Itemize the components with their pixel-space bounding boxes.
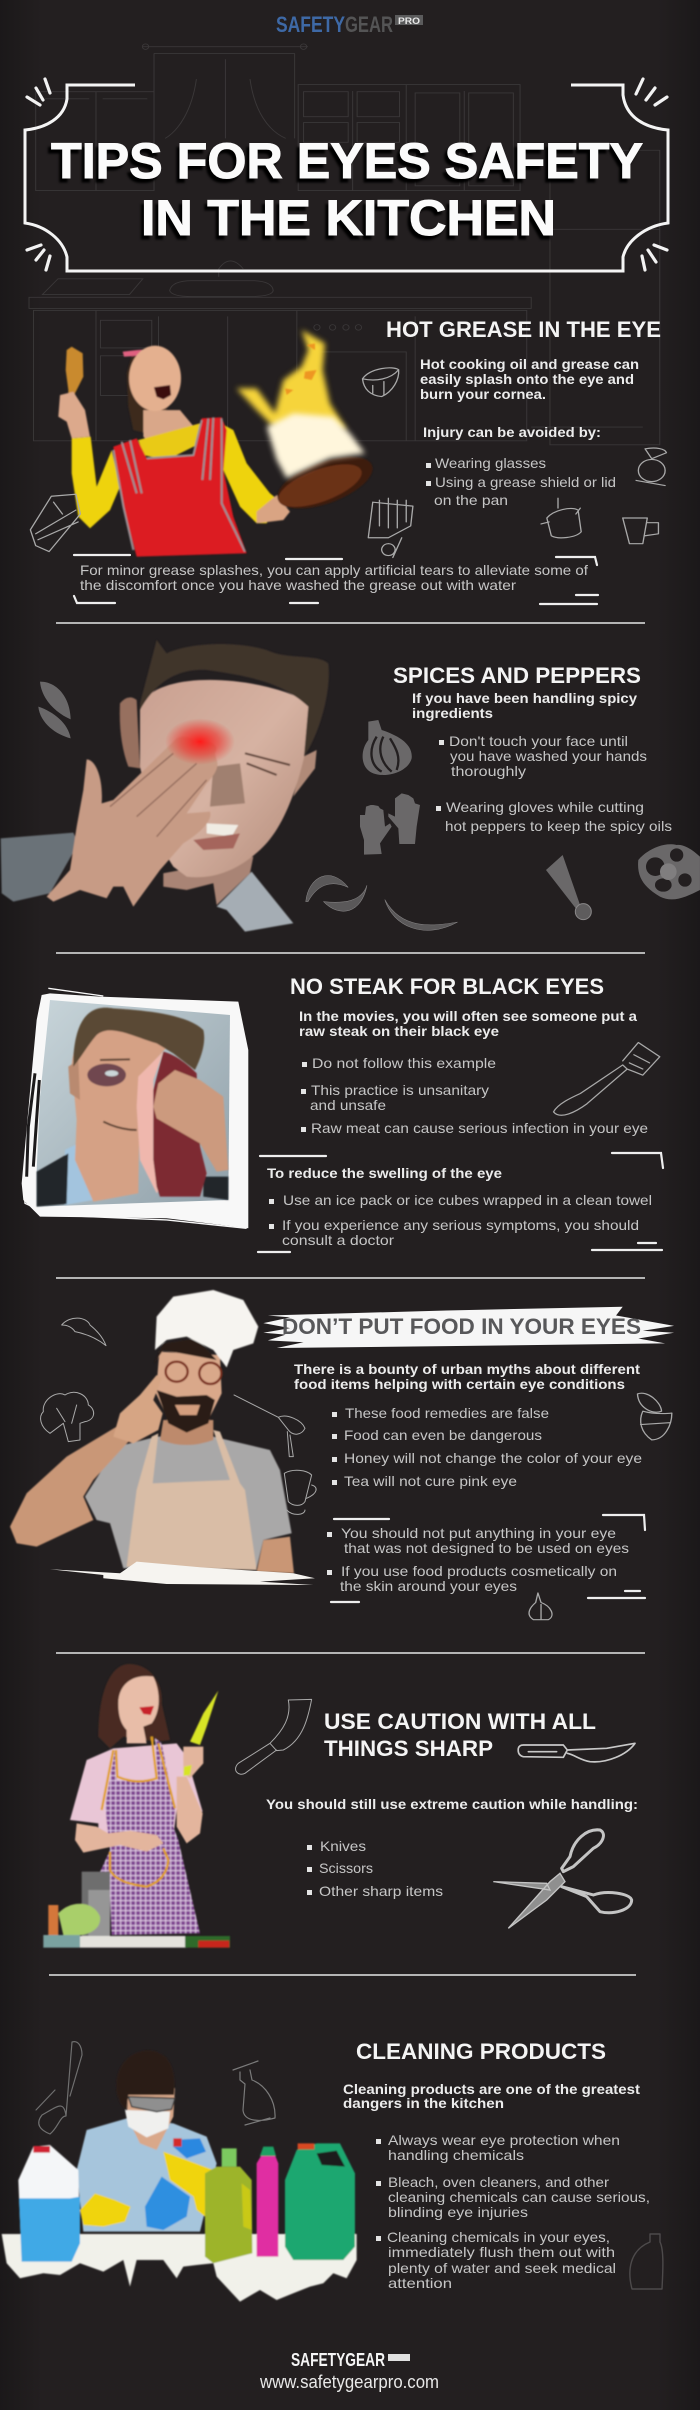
icon: bowl: [362, 368, 399, 397]
icon: stacked bowls: [637, 1393, 672, 1440]
footer logo: SAFETYGEAR: [291, 2350, 385, 2370]
panel: spices and peppers: [1, 640, 700, 932]
icon: onion: [363, 720, 412, 775]
heading: spices: SPICES AND PEPPERS: [393, 663, 641, 688]
intro text: easily splash onto the eye and: [420, 371, 634, 387]
chalk corner dashes: [74, 555, 598, 604]
bullet list: cosmetics: If you use food products cosmetically on: [341, 1563, 617, 1579]
intro text: burn your cornea.: [420, 386, 546, 402]
figure: woman and cleaning bottles: [2, 2050, 357, 2302]
bullet list: avoid injury: [426, 455, 616, 508]
bullet list: chemicals: immediately flush them out with: [388, 2244, 615, 2260]
intro text: If you have been handling spicy: [412, 690, 637, 706]
title: IN THE KITCHEN: [141, 190, 556, 246]
icon: fries: [368, 498, 413, 538]
icon: cleaver: [236, 1699, 312, 1774]
icon: pepper slice: [638, 844, 700, 899]
bullet list: chemicals: Bleach, oven cleaners, and other: [388, 2174, 609, 2190]
chalk corner dashes: [258, 1153, 663, 1252]
icon: spring onion: [546, 855, 591, 920]
bullet list: swelling: consult a doctor: [282, 1232, 394, 1248]
icon: basting brush: [36, 2042, 82, 2134]
title: TIPS FOR EYES SAFETY: [51, 133, 643, 189]
icon: scissors: [493, 1830, 632, 1928]
note: minor splashes: For minor grease splashes, you can apply artificial tears to alleviate some of: [80, 562, 588, 578]
icon: kitchen scale: [636, 448, 666, 486]
intro text: Injury can be avoided by:: [423, 424, 601, 440]
bullet list: avoid injury: Wearing glasses: [435, 455, 546, 471]
bullet list: spices: Don't touch your face until: [449, 733, 628, 749]
bullet list: avoid injury: Using a grease shield or lid: [435, 474, 616, 490]
bullet list: sharp items: Knives: [320, 1838, 366, 1854]
icon: sandwich: [30, 494, 80, 552]
icon: gloves: [360, 793, 420, 855]
intro text: raw steak on their black eye: [299, 1023, 499, 1039]
icon: curved chilies: [306, 876, 458, 930]
figure: man rubbing eye: [1, 640, 329, 932]
intro text: In the movies, you will often see someone put a: [299, 1008, 637, 1024]
icon: pot: [541, 498, 581, 538]
bullet list: cosmetics: [327, 1525, 629, 1594]
bullet list: spices: you have washed your hands: [450, 748, 647, 764]
bullet list: cosmetics: that was not designed to be used on eyes: [344, 1540, 629, 1556]
bullet list: chemicals: attention: [388, 2275, 452, 2291]
panel: use caution with sharp things: [43, 1664, 638, 1948]
header logo: SAFETY: [276, 12, 345, 37]
heading: caution: THINGS SHARP: [324, 1736, 493, 1761]
bullet list: sharp items: [307, 1838, 443, 1899]
icon: jug: [623, 518, 658, 544]
bullet list: avoid injury: on the pan: [434, 492, 508, 508]
heading: no steak: NO STEAK FOR BLACK EYES: [290, 974, 604, 999]
intro text: Hot cooking oil and grease can: [420, 356, 639, 372]
intro text: [412, 690, 637, 721]
icon: bottle: [630, 2234, 663, 2289]
bullet list: spices: hot peppers to keep the spicy oils: [445, 818, 672, 834]
bullet list: swelling: [269, 1192, 652, 1248]
panel: hot grease: [30, 317, 666, 604]
icon: kitchen knife: [518, 1743, 635, 1762]
heading: caution: USE CAUTION WITH ALL: [324, 1709, 596, 1734]
icon: spray bottle: [233, 2061, 275, 2125]
icon: garlic: [529, 1593, 552, 1620]
icon: mug: [284, 1470, 316, 1514]
bullet list: steak: [301, 1055, 648, 1136]
heading: hot grease: HOT GREASE IN THE EYE: [386, 317, 661, 342]
intro text: [299, 1008, 637, 1039]
heading: caution: [324, 1709, 596, 1761]
note: minor splashes: [80, 562, 588, 593]
header logo: GEAR: [345, 12, 393, 37]
chalk corner dashes: [331, 1515, 645, 1602]
bullet list: spices: Wearing gloves while cutting: [446, 799, 644, 815]
photo: man with steak in chalk frame: [22, 988, 248, 1228]
title: [51, 133, 643, 246]
bullet list: cosmetics: the skin around your eyes: [340, 1578, 517, 1594]
icon: chili outline: [62, 1318, 106, 1346]
intro text: food items helping with certain eye conditions: [294, 1376, 625, 1392]
bullet list: remedies: Tea will not cure pink eye: [344, 1473, 517, 1489]
panel: cleaning products: [2, 2039, 663, 2302]
bullet list: remedies: These food remedies are false: [345, 1405, 549, 1421]
bullet list: remedies: Honey will not change the color of your eye: [344, 1450, 642, 1466]
heading banner: white brush: [263, 1307, 674, 1348]
footer url: www.safetygearpro.com: [259, 2372, 439, 2392]
bullet list: swelling: If you experience any serious symptoms, you should: [282, 1217, 639, 1233]
bullet list: cosmetics: You should not put anything in your eye: [341, 1525, 616, 1541]
bullet list: spices: [436, 733, 672, 834]
intro text: dangers in the kitchen: [343, 2095, 504, 2111]
header logo: [276, 12, 423, 37]
note: minor splashes: the discomfort once you have washed the grease out with water: [80, 577, 516, 593]
header logo: PRO: [398, 16, 420, 26]
icon: fries garnish ring: [382, 538, 402, 558]
bullet list: chemicals: Always wear eye protection when: [388, 2132, 620, 2148]
bullet list: remedies: Food can even be dangerous: [344, 1427, 542, 1443]
figure: woman with knife: [43, 1664, 230, 1948]
bullet list: steak: This practice is unsanitary: [311, 1082, 489, 1098]
icon: broccoli: [41, 1392, 94, 1442]
panel: no steak for black eyes: [22, 974, 663, 1252]
icon: spatula: [554, 1042, 660, 1115]
intro text: [343, 2081, 640, 2111]
panel: don't put food in your eyes: [10, 1290, 674, 1620]
bullet list: sharp items: Scissors: [319, 1860, 373, 1876]
heading: food: DON’T PUT FOOD IN YOUR EYES: [282, 1314, 641, 1339]
figure: bearded chef: [10, 1290, 315, 1585]
intro text: You should still use extreme caution while handling:: [266, 1796, 638, 1812]
kitchen line-art backdrop: [29, 44, 660, 445]
icon: honey dipper: [234, 1395, 305, 1457]
figure: woman with flaming pan: [58, 330, 379, 557]
bullet list: remedies: [332, 1405, 642, 1489]
bullet list: chemicals: Cleaning chemicals in your eyes,: [387, 2229, 610, 2245]
bullet list: steak: and unsafe: [310, 1097, 386, 1113]
bullet list: swelling: Use an ice pack or ice cubes wrapped in a clean towel: [283, 1192, 652, 1208]
bullet list: steak: Do not follow this example: [312, 1055, 496, 1071]
swelling advice: To reduce the swelling of the eye: [267, 1165, 502, 1181]
bullet list: chemicals: handling chemicals: [388, 2147, 524, 2163]
intro text: [420, 356, 639, 440]
bullet list: chemicals: plenty of water and seek medical: [388, 2260, 616, 2276]
bullet list: steak: Raw meat can cause serious infection in your eye: [311, 1120, 648, 1136]
title frame: [25, 79, 668, 271]
bullet list: chemicals: blinding eye injuries: [388, 2204, 528, 2220]
bullet list: spices: thoroughly: [451, 763, 526, 779]
bullet list: chemicals: [376, 2132, 650, 2291]
intro text: ingredients: [412, 705, 493, 721]
intro text: Cleaning products are one of the greatest: [343, 2081, 640, 2097]
heading: cleaning: CLEANING PRODUCTS: [356, 2039, 606, 2064]
intro text: There is a bounty of urban myths about different: [294, 1361, 640, 1377]
icon: chili pair: [38, 682, 71, 738]
bullet list: sharp items: Other sharp items: [319, 1883, 443, 1899]
bullet list: chemicals: cleaning chemicals can cause serious,: [388, 2189, 650, 2205]
intro text: [294, 1361, 640, 1392]
